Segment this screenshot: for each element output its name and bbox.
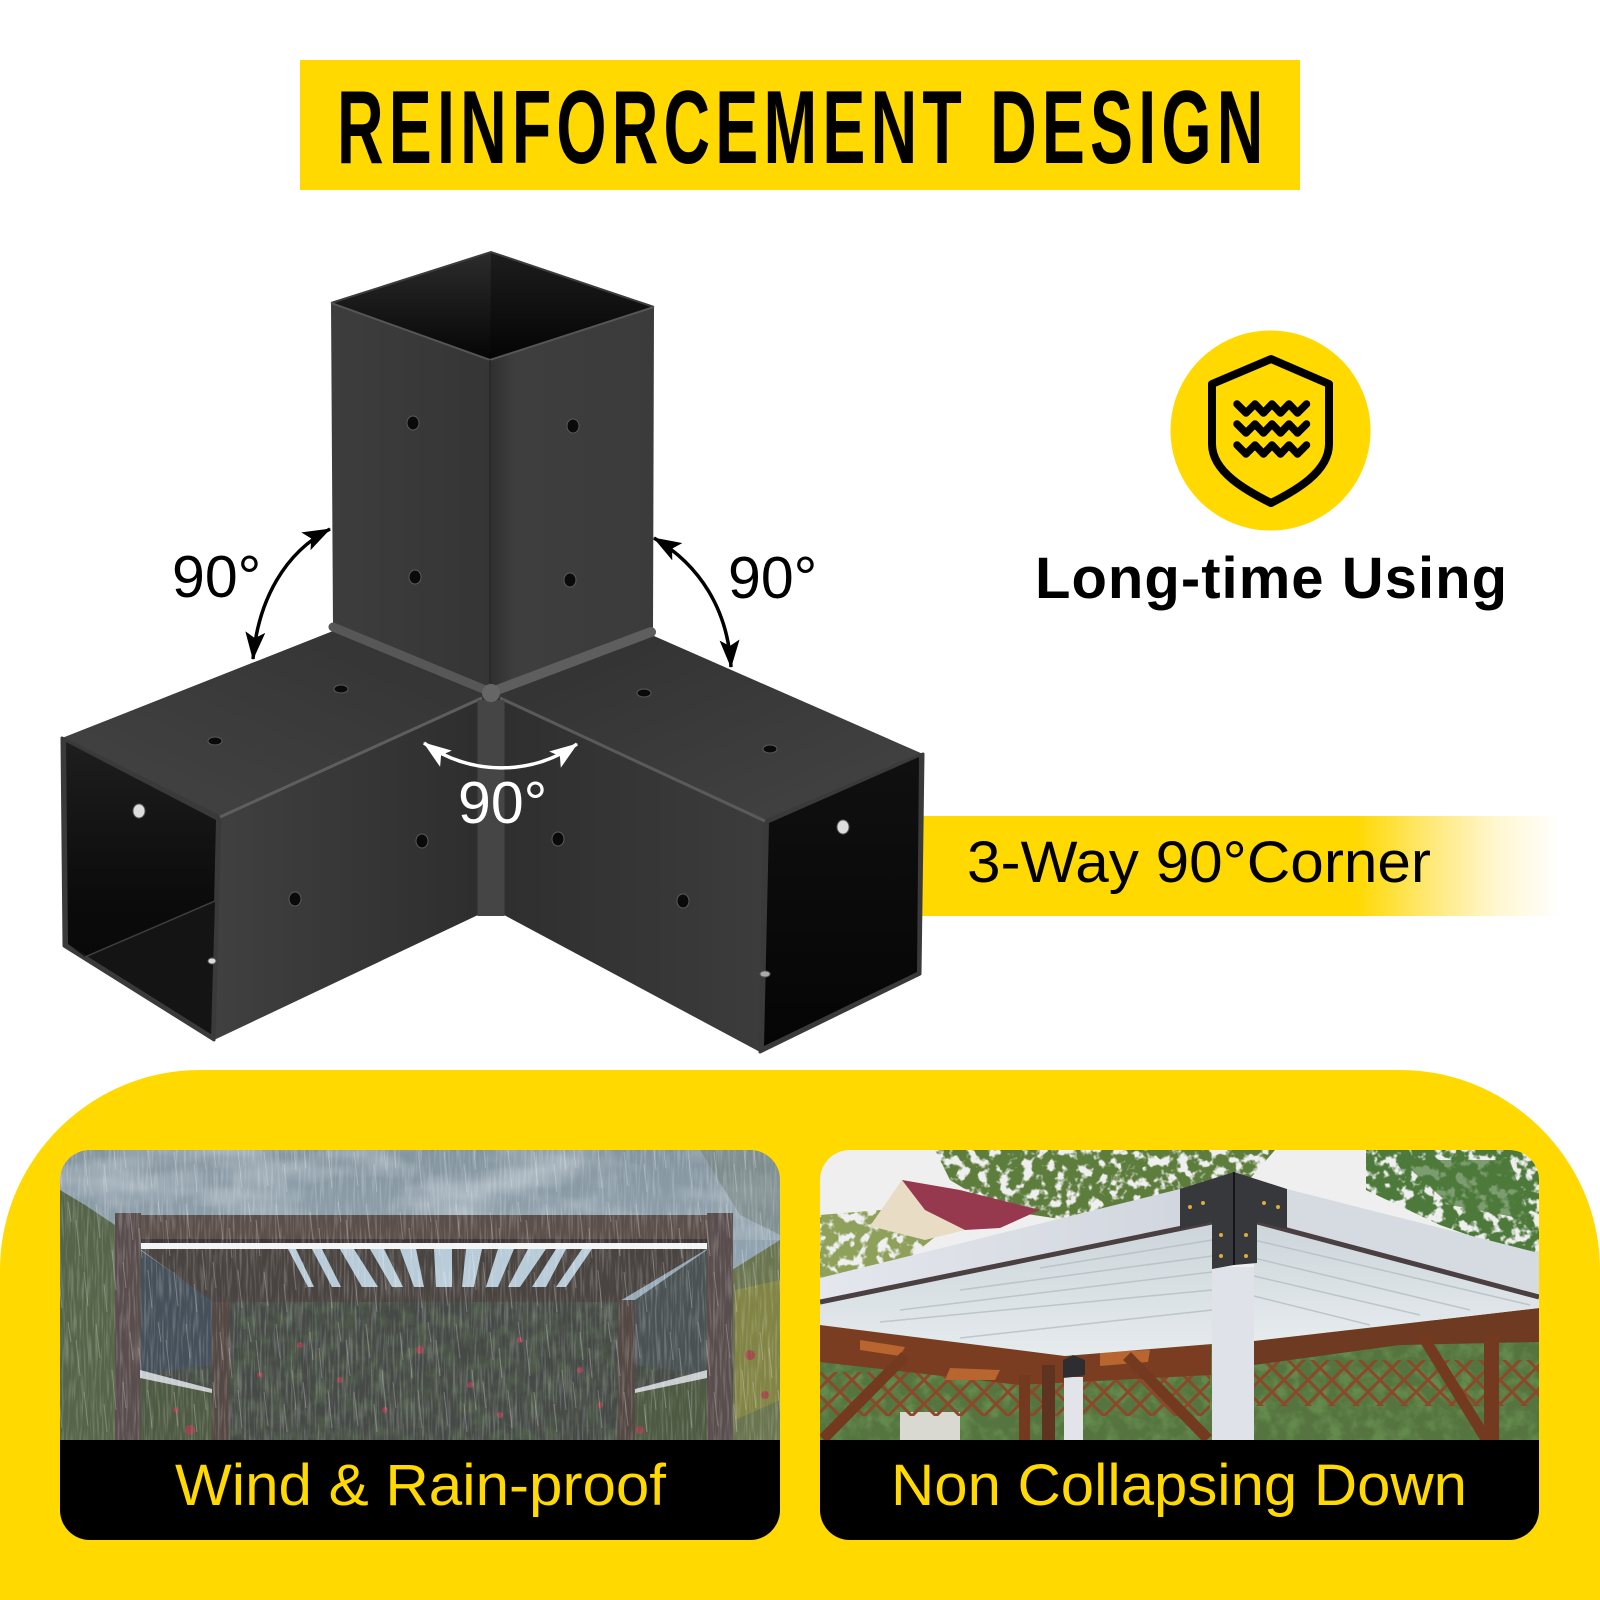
right tube <box>491 636 923 1052</box>
corner bracket <box>1180 1172 1287 1269</box>
beams <box>820 1189 1180 1300</box>
mounting holes <box>133 416 849 977</box>
distant foliage inside pergola <box>140 1300 707 1440</box>
roof louvers <box>140 1249 707 1301</box>
icon: waterproof shield <box>1170 330 1370 530</box>
caption band: 3-way corner <box>920 816 1560 916</box>
product: 3-way bracket <box>62 252 923 1052</box>
panel: non collapsing photo card <box>820 1150 1539 1540</box>
flowers <box>173 1337 769 1435</box>
title banner: REINFORCEMENT DESIGN <box>337 70 1263 186</box>
left tube <box>62 631 491 1040</box>
panel: wind and rain photo card <box>60 1150 780 1540</box>
lower background and wood <box>820 1320 1539 1440</box>
upper tube faces <box>331 303 654 692</box>
rain overlay <box>60 1150 780 1440</box>
trees <box>820 1150 1539 1285</box>
panel: yellow base <box>0 1070 1600 1600</box>
angle arrow: right 90 <box>654 538 817 667</box>
label: long-time using: Long-time Using <box>1035 546 1507 611</box>
white post <box>1212 1267 1254 1440</box>
photo: pergola in the rain <box>60 1150 780 1440</box>
caption band: 3-way corner: 3-Way 90°Corner <box>967 830 1431 895</box>
welds <box>333 627 651 916</box>
side rails <box>140 1370 212 1393</box>
upper tube opening <box>331 252 654 360</box>
angle arrow: left 90: 90° <box>172 544 261 610</box>
label: non collapsing down: Non Collapsing Down <box>891 1453 1467 1518</box>
bracket base fill <box>333 600 654 915</box>
posts <box>115 1213 141 1440</box>
angle arrow: center 90: 90° <box>458 770 547 836</box>
ceiling louvers <box>820 1222 1212 1356</box>
small bracket <box>1063 1355 1085 1378</box>
angle arrow: left 90 <box>172 529 330 659</box>
house <box>870 1180 1040 1240</box>
angle arrow: right 90: 90° <box>728 545 817 611</box>
angle arrow: center 90 <box>424 743 577 836</box>
photo: white pergola corner <box>820 1150 1539 1440</box>
white bar and top beam <box>141 1243 707 1249</box>
label: wind and rain-proof: Wind & Rain-proof <box>175 1453 667 1518</box>
side foliage <box>60 1190 115 1440</box>
